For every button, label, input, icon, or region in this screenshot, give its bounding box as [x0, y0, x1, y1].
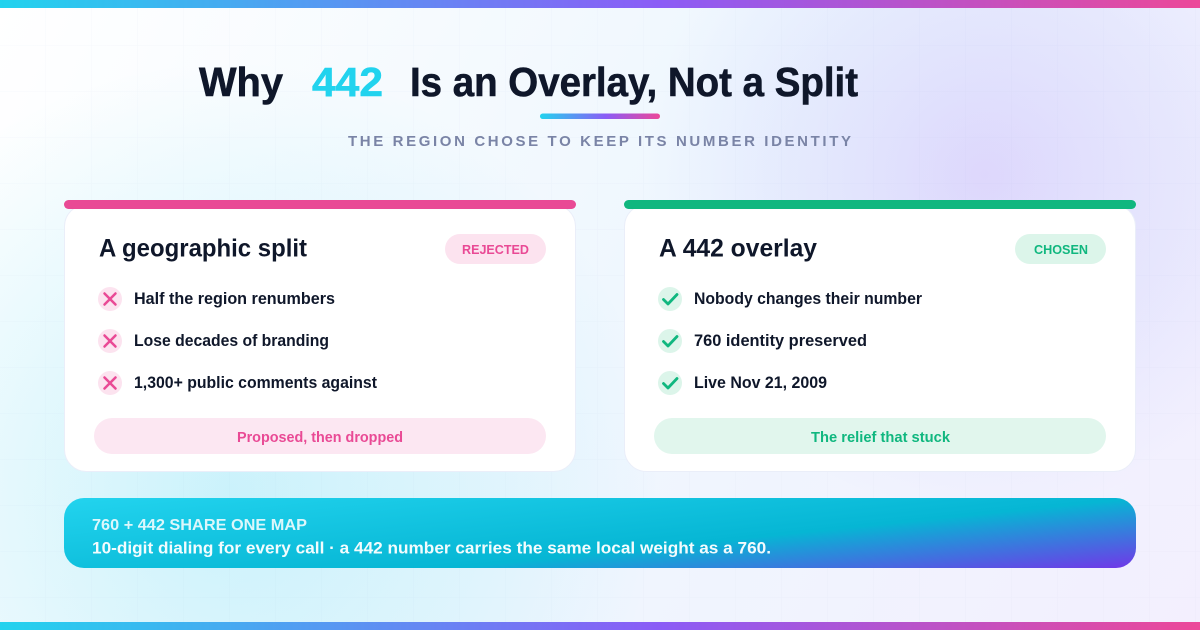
footer pill: proposed then dropped: Proposed, then dropped [237, 429, 403, 446]
heading: A 442 overlay [659, 234, 817, 262]
panel: geographic split (rejected) [64, 200, 576, 472]
title: Is an Overlay, Not a Split [410, 59, 858, 105]
card top bar [624, 200, 1136, 209]
panel: 442 overlay (chosen) [624, 200, 1136, 472]
bottom gradient bar [0, 622, 1200, 630]
list item: half the region [98, 287, 335, 311]
banner label: 760 + 442 SHARE ONE MAP [92, 517, 307, 534]
badge: chosen [1015, 234, 1106, 264]
list item: public comments: 1,300+ public comments against [134, 374, 377, 392]
list item: live date: Live Nov 21, 2009 [694, 374, 827, 392]
list item: identity preserved [658, 329, 867, 353]
list item: identity preserved: 760 identity preserved [694, 332, 867, 350]
list item: lose branding [98, 329, 329, 353]
card body [624, 204, 1136, 472]
subtitle: THE REGION CHOSE TO KEEP ITS NUMBER IDENTITY [348, 133, 851, 150]
title [199, 59, 858, 105]
footer pill: the relief that stuck [654, 418, 1106, 454]
list item: lose branding: Lose decades of branding [134, 332, 329, 350]
list item: half the region: Half the region renumbers [134, 290, 335, 308]
list item: nobody changes [658, 287, 923, 311]
heading: A geographic split [99, 234, 308, 262]
badge: chosen: CHOSEN [1034, 242, 1088, 257]
badge: rejected: REJECTED [462, 242, 529, 257]
card top bar [64, 200, 576, 209]
footer pill: proposed then dropped [94, 418, 546, 454]
title: Why [199, 59, 283, 105]
banner body: 10-digit dialing for every call · a 442 number carries the same local weight as a 760. [92, 538, 771, 558]
list item: public comments [98, 371, 377, 395]
card body [64, 204, 576, 472]
title: 442 [312, 59, 383, 105]
footer pill: the relief that stuck: The relief that stuck [811, 429, 951, 446]
list item: nobody changes: Nobody changes their number [694, 290, 923, 308]
top gradient bar [0, 0, 1200, 8]
title underline [540, 114, 660, 119]
badge: rejected [445, 234, 546, 264]
banner callout [64, 498, 1136, 568]
list item: live date [658, 371, 827, 395]
